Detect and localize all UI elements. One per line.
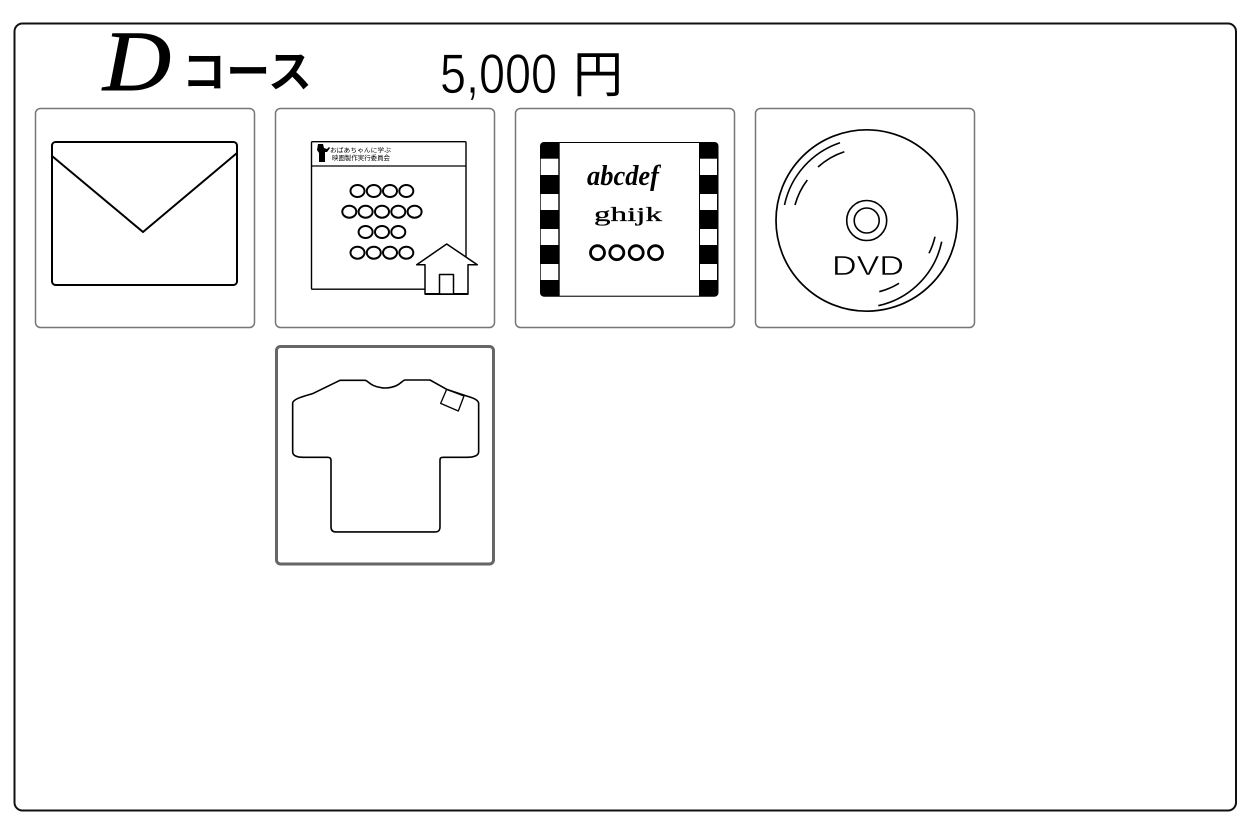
card: DVD bbox=[756, 108, 974, 328]
icon: T-shirt bbox=[293, 380, 479, 532]
icon: sleeve patch bbox=[441, 389, 464, 411]
icon: flyer sheet bbox=[312, 142, 466, 289]
price bbox=[440, 35, 623, 107]
icon: flyer sheet: 映画製作実行委員会 bbox=[332, 153, 391, 162]
card: T-shirt (selected) bbox=[276, 346, 494, 564]
price: 円 bbox=[573, 35, 623, 107]
title: D course bbox=[102, 13, 312, 109]
icon: flyer sheet: おばあちゃんに学ぶ bbox=[330, 146, 391, 154]
icon: film strip: abcdef bbox=[587, 161, 662, 192]
price: 5,000 bbox=[440, 42, 557, 105]
card: screening ticket bbox=[276, 108, 494, 328]
title: D course: コース bbox=[182, 48, 312, 97]
card: letter envelope bbox=[36, 108, 254, 328]
card: film bbox=[516, 108, 734, 328]
icon: film strip: ghijk bbox=[594, 204, 662, 226]
icon: DVD disc: DVD bbox=[832, 250, 904, 281]
icon: film strip bbox=[540, 142, 718, 297]
icon: house bbox=[417, 244, 477, 294]
title: D course: D bbox=[102, 13, 171, 109]
icon: DVD disc bbox=[776, 130, 957, 311]
icon: envelope bbox=[52, 142, 237, 285]
